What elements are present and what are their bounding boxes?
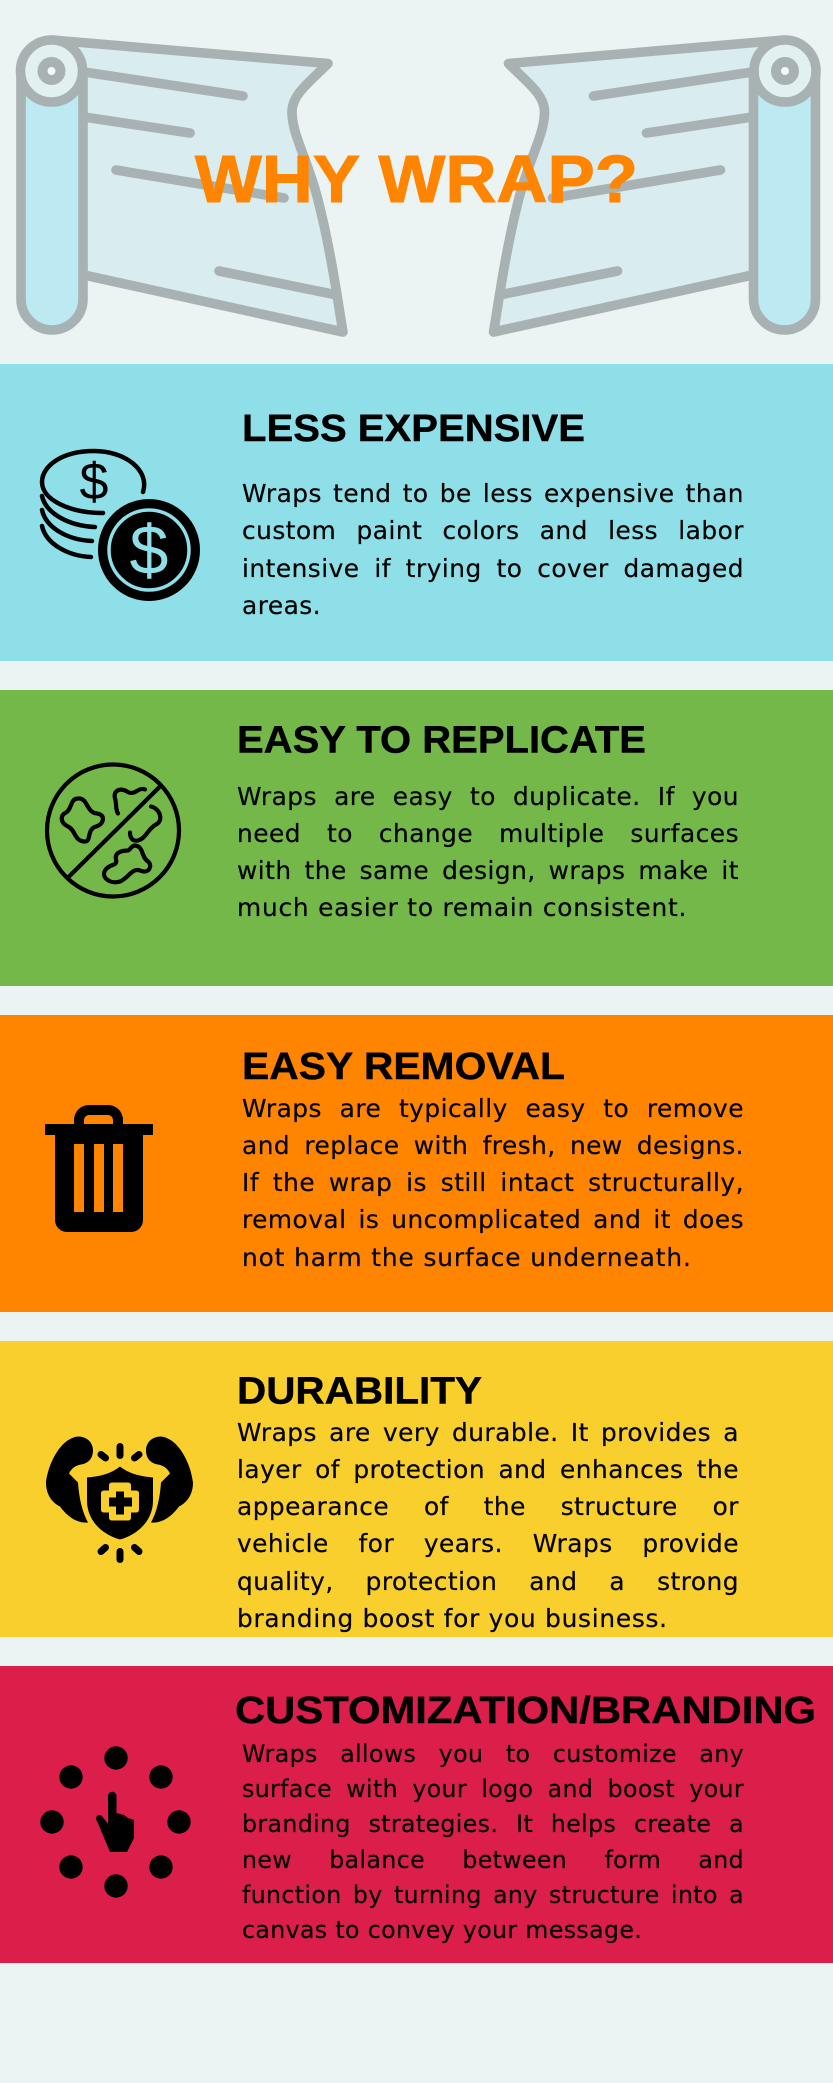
body text: branding boost for you business. bbox=[237, 1604, 668, 1633]
illustration: left wrap roll bbox=[20, 40, 343, 332]
icon: trash can bbox=[45, 1110, 153, 1232]
body text bbox=[242, 479, 744, 620]
panel: customization and branding bbox=[0, 1666, 833, 1962]
icon: stack of coins bbox=[42, 451, 200, 601]
heading: LESS EXPENSIVE bbox=[242, 408, 585, 450]
panel: easy to replicate bbox=[0, 690, 833, 986]
panel: easy removal bbox=[0, 1015, 833, 1312]
body text: function by turning any structure into a bbox=[242, 1881, 744, 1909]
body text bbox=[242, 1740, 744, 1944]
panel: durability bbox=[0, 1340, 833, 1637]
body text: much easier to remain consistent. bbox=[237, 893, 687, 922]
header: rolls of wrap with title bbox=[16, 35, 821, 337]
body text bbox=[237, 1418, 739, 1633]
body text: intensive if trying to cover damaged bbox=[242, 554, 744, 583]
body text: custom paint colors and less labor bbox=[242, 516, 744, 545]
icon: stack of coins: $ bbox=[80, 453, 109, 511]
body text: branding strategies. It helps create a bbox=[242, 1810, 744, 1838]
body text: Wraps are easy to duplicate. If you bbox=[237, 782, 739, 810]
body text: with the same design, wraps make it bbox=[237, 856, 739, 885]
body text: not harm the surface underneath. bbox=[242, 1243, 692, 1272]
icon: pointing hand with circle of dots bbox=[40, 1746, 191, 1898]
icon: muscular arms with shield bbox=[46, 1436, 193, 1559]
heading: DURABILITY bbox=[237, 1370, 482, 1412]
panel: less expensive bbox=[0, 364, 833, 660]
icon: crossed out stains bbox=[47, 764, 179, 896]
illustration: right wrap roll bbox=[494, 40, 816, 332]
body text: surface with your logo and boost your bbox=[242, 1775, 744, 1803]
body text bbox=[237, 782, 739, 922]
icon: stack of coins: $ bbox=[130, 511, 168, 589]
body text: and replace with fresh, new designs. bbox=[242, 1131, 744, 1160]
body text: appearance of the structure or bbox=[237, 1492, 739, 1521]
title: WHY WRAP? bbox=[195, 142, 638, 217]
body text: quality, protection and a strong bbox=[237, 1567, 739, 1596]
body text: new balance between form and bbox=[242, 1846, 744, 1874]
body text: Wraps allows you to customize any bbox=[242, 1740, 744, 1768]
body text: If the wrap is still intact structurally, bbox=[242, 1168, 744, 1197]
body text: removal is uncomplicated and it does bbox=[242, 1205, 744, 1234]
heading: EASY REMOVAL bbox=[242, 1046, 565, 1088]
body text: areas. bbox=[242, 591, 321, 620]
heading: EASY TO REPLICATE bbox=[237, 719, 646, 761]
body text bbox=[242, 1094, 744, 1272]
body text: Wraps are typically easy to remove bbox=[242, 1094, 744, 1122]
body text: layer of protection and enhances the bbox=[237, 1455, 739, 1484]
body text: need to change multiple surfaces bbox=[237, 819, 739, 848]
body text: Wraps tend to be less expensive than bbox=[242, 479, 744, 508]
body text: canvas to convey your message. bbox=[242, 1916, 642, 1944]
body text: Wraps are very durable. It provides a bbox=[237, 1418, 739, 1446]
heading: CUSTOMIZATION/BRANDING bbox=[235, 1690, 816, 1732]
body text: vehicle for years. Wraps provide bbox=[237, 1529, 739, 1558]
